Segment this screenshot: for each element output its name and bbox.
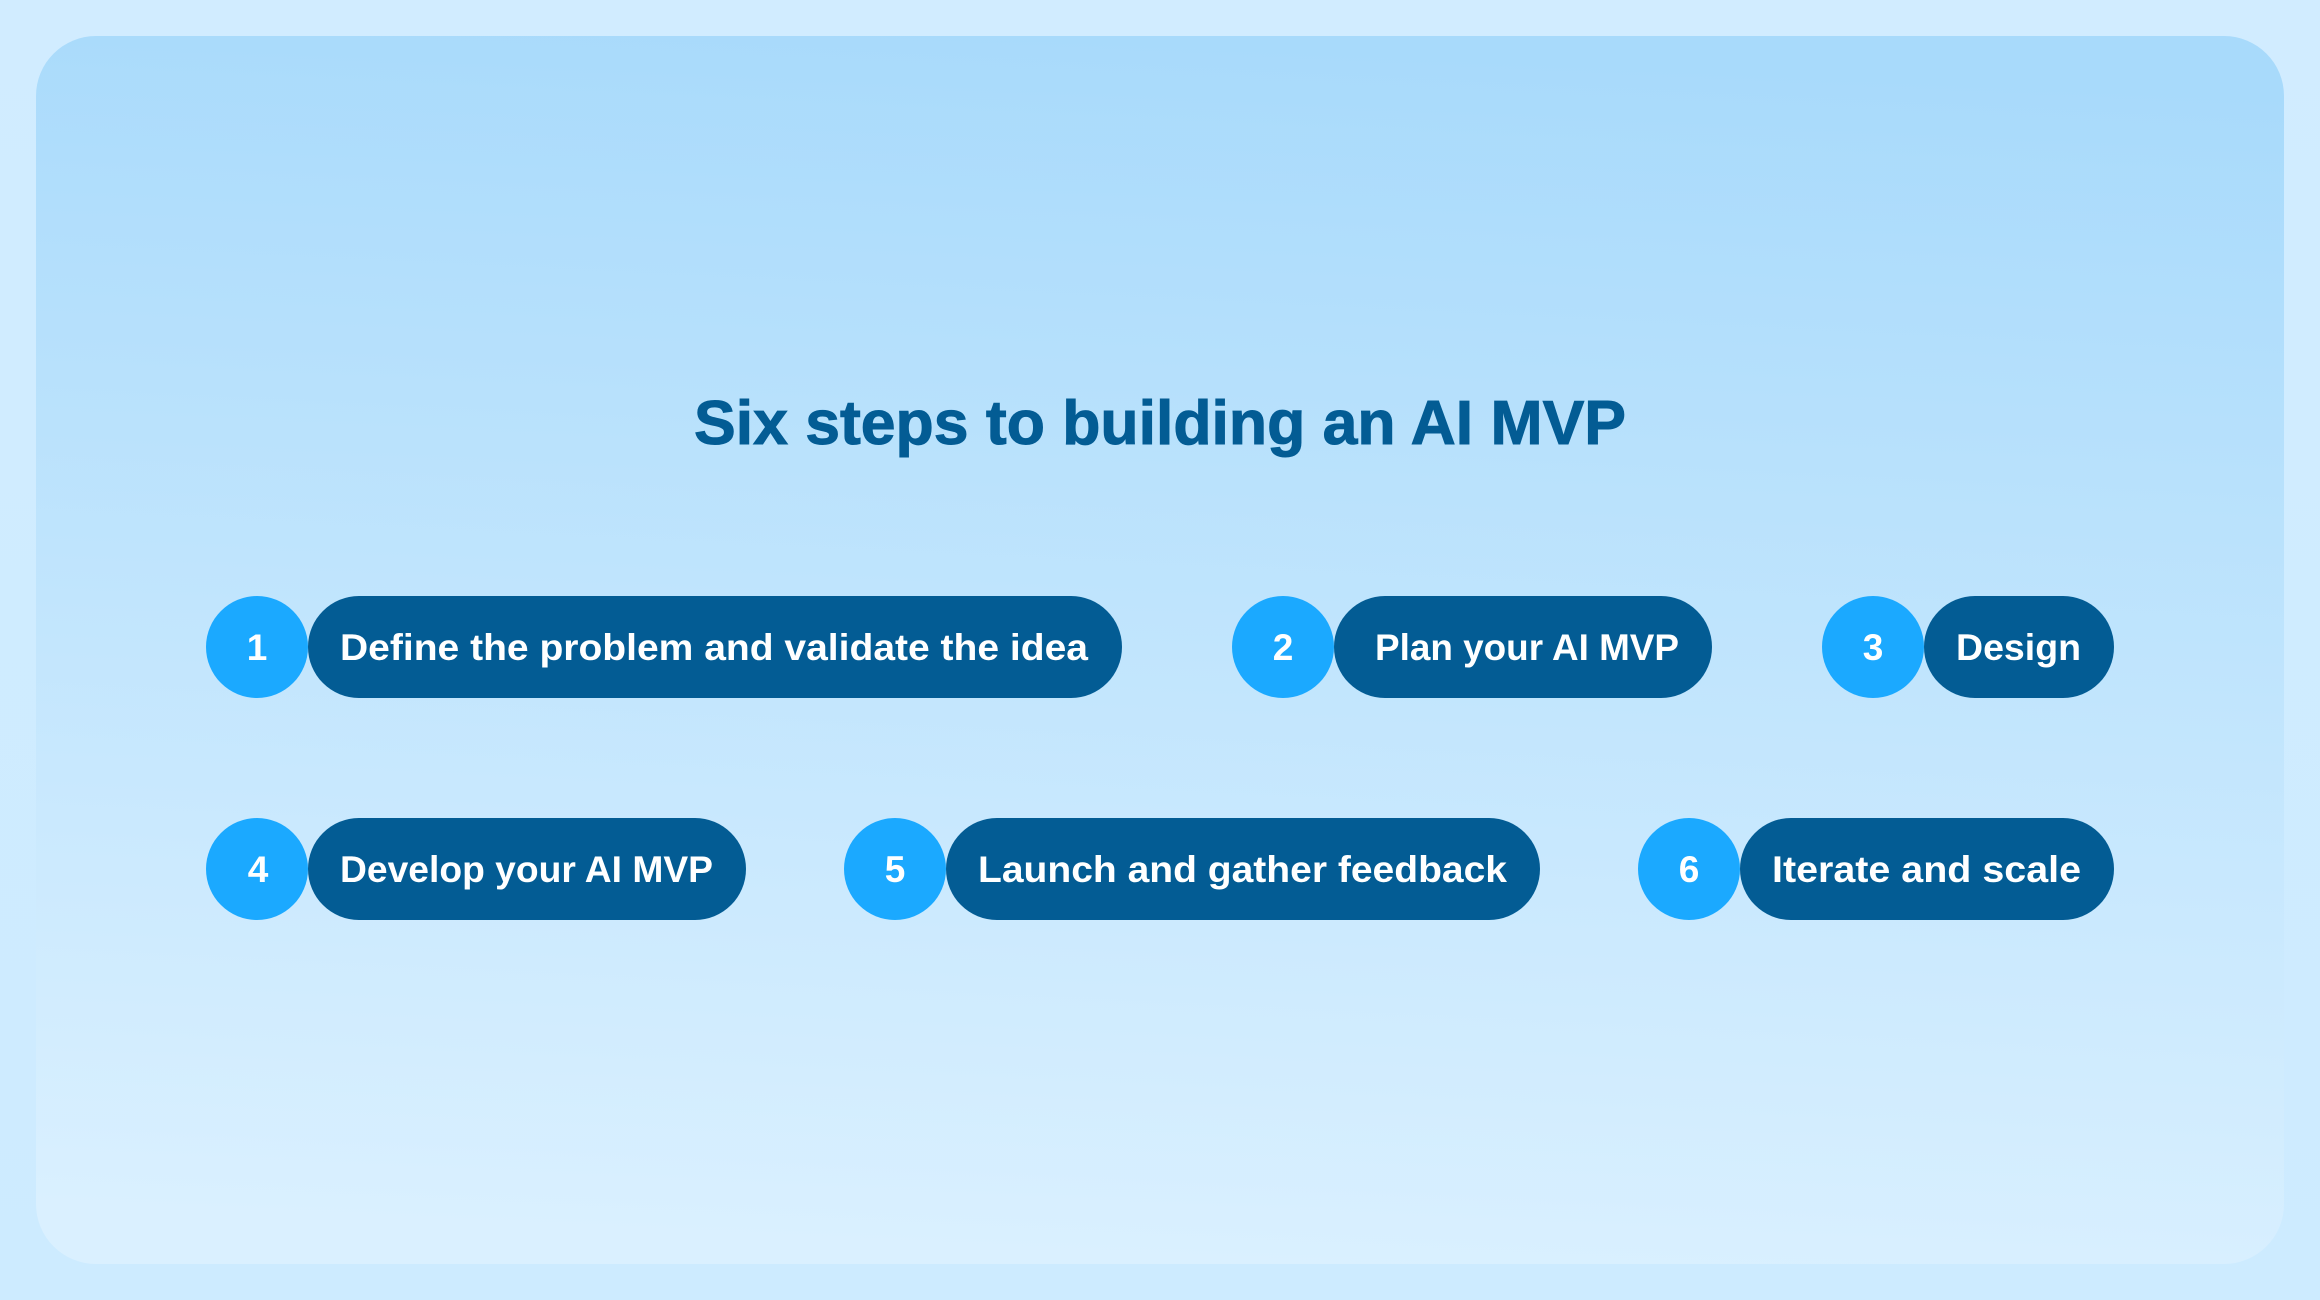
step 1: define the problem: Define the problem and validate the idea xyxy=(340,627,1088,668)
title: Six steps to building an AI MVP xyxy=(694,389,1626,458)
step 5: launch: Launch and gather feedback xyxy=(978,849,1507,890)
step 6: iterate: 6 xyxy=(1679,849,1699,890)
step 2: plan: Plan your AI MVP xyxy=(1375,627,1679,668)
step 3: design xyxy=(1822,596,2114,698)
step 1: define the problem: 1 xyxy=(247,627,267,668)
step 3: design: Design xyxy=(1956,627,2081,668)
step 4: develop: 4 xyxy=(248,849,269,890)
step 2: plan: 2 xyxy=(1273,627,1293,668)
step 3: design: 3 xyxy=(1863,627,1883,668)
step 5: launch: 5 xyxy=(885,849,905,890)
step 4: develop: Develop your AI MVP xyxy=(340,849,713,890)
step 1: define the problem xyxy=(206,596,1122,698)
step 6: iterate: Iterate and scale xyxy=(1772,849,2081,890)
step 6: iterate xyxy=(1638,818,2114,920)
step 2: plan xyxy=(1232,596,1712,698)
step 4: develop xyxy=(206,818,746,920)
step 5: launch xyxy=(844,818,1540,920)
